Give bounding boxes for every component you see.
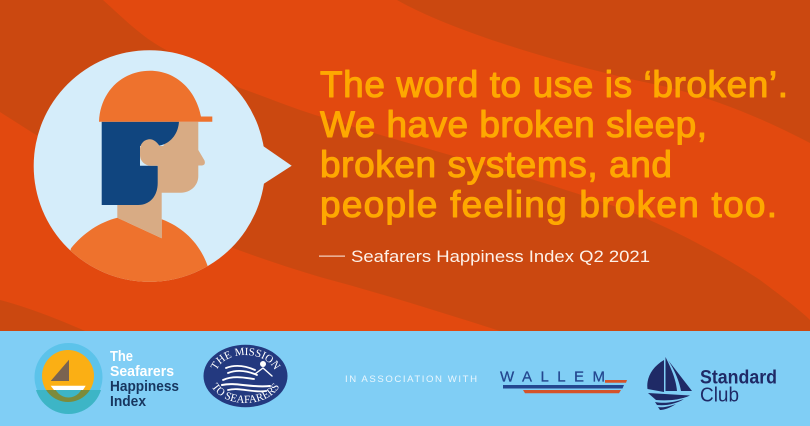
quote heading: We have broken sleep, <box>320 104 707 145</box>
logo: The Mission to Seafarers: THE MISSION <box>210 348 281 370</box>
quote heading: broken systems, and <box>320 144 672 185</box>
speech bubble <box>34 50 292 282</box>
logo: The Seafarers Happiness Index: Index <box>110 393 147 410</box>
panel: footer logo bar <box>0 331 810 426</box>
quote heading: The word to use is ‘broken’. <box>320 64 788 105</box>
attribution: Seafarers Happiness Index Q2 2021 <box>351 247 650 266</box>
logo: The Seafarers Happiness Index: Happiness <box>110 378 179 395</box>
logo: Standard Club: Standard <box>700 368 777 388</box>
quote heading: people feeling broken too. <box>320 184 777 225</box>
logo: The Seafarers Happiness Index <box>34 343 179 414</box>
logo: Standard Club <box>647 357 777 410</box>
logo: The Mission to Seafarers: TO SEAFARERS <box>212 382 278 404</box>
logo: The Mission to Seafarers <box>204 344 288 408</box>
text: in association with: IN ASSOCIATION WITH <box>345 374 477 385</box>
logo: The Seafarers Happiness Index: The <box>110 348 133 365</box>
panel: orange background <box>0 0 810 331</box>
logo: The Seafarers Happiness Index: Seafarers <box>110 363 174 380</box>
quote heading <box>320 64 788 225</box>
logo: Wallem <box>500 369 627 393</box>
logo: Standard Club: Club <box>700 385 739 407</box>
icon: speech bubble with seafarer portrait <box>34 50 292 290</box>
portrait figure <box>70 70 212 282</box>
logo: Wallem: WALLEM <box>500 369 605 386</box>
